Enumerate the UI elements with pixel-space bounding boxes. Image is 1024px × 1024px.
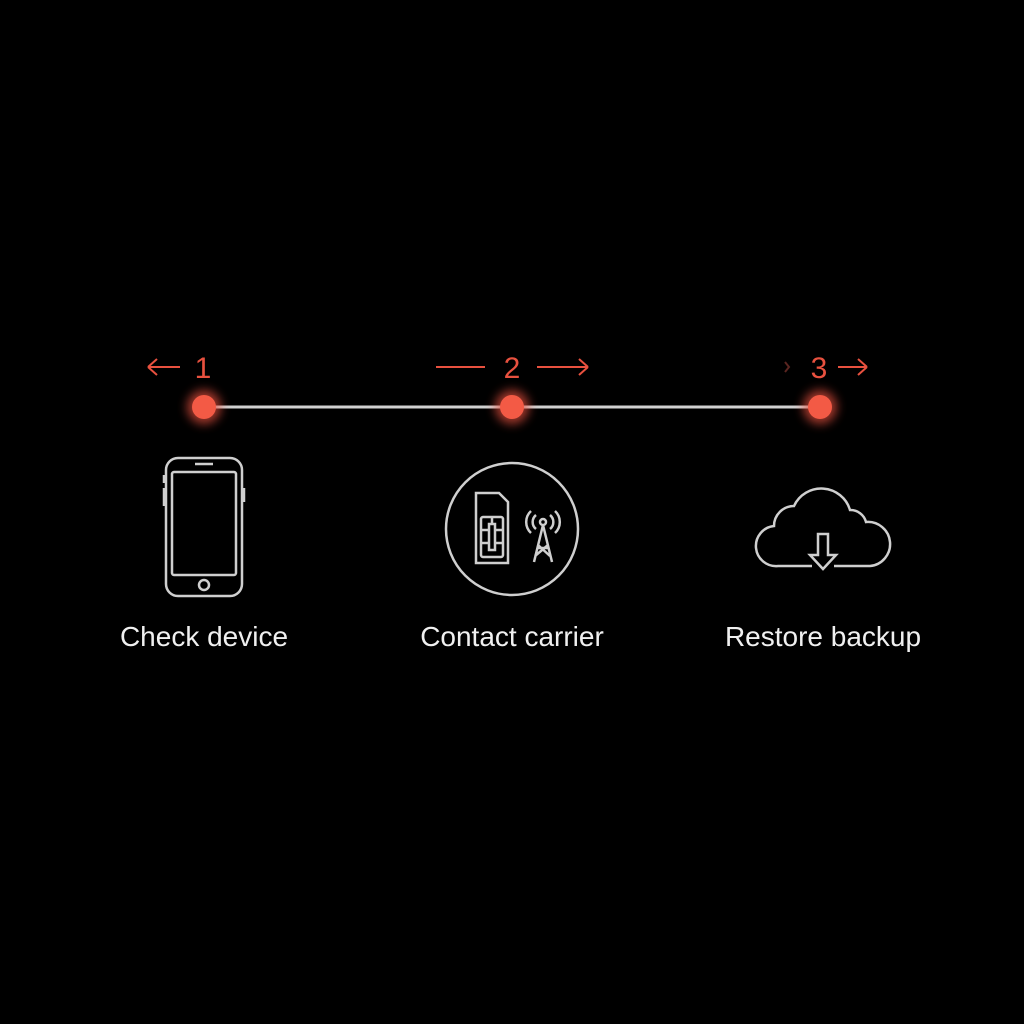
marker 2: 2 — [504, 352, 520, 385]
marker 1 — [148, 352, 211, 385]
icon: sim and tower in circle — [446, 463, 578, 595]
label 2: Contact carrier — [420, 621, 604, 652]
step markers row — [148, 352, 867, 385]
dot 2 — [495, 390, 529, 424]
icon: phone — [164, 458, 244, 596]
dot 3 — [803, 390, 837, 424]
marker 3 — [785, 352, 867, 385]
icon: cloud download — [756, 489, 890, 569]
dot 1 — [187, 390, 221, 424]
label 1: Check device — [120, 621, 288, 652]
marker 2 — [436, 352, 588, 385]
timeline — [187, 390, 837, 424]
step labels — [120, 621, 921, 652]
marker 1: 1 — [195, 352, 211, 385]
label 3: Restore backup — [725, 621, 921, 652]
marker 3: 3 — [811, 352, 827, 385]
